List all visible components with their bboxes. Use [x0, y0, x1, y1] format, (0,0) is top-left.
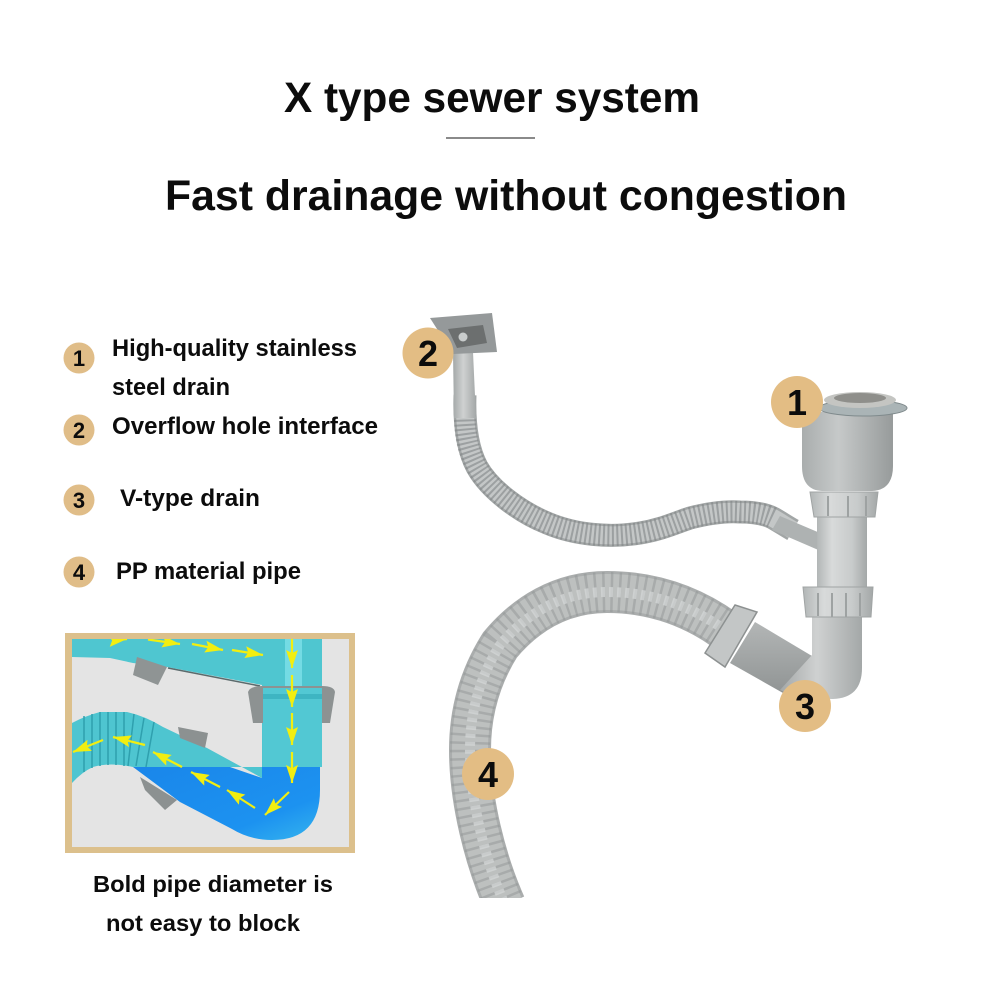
overflow plate: [430, 313, 497, 354]
v-type elbow: [780, 615, 862, 699]
vertical pipe collar: [248, 686, 335, 723]
upper pipe nut: [133, 657, 167, 685]
flow arrows: [73, 639, 292, 815]
pp material hose: [470, 592, 725, 905]
inset caption: Bold pipe diameter is: [93, 871, 333, 897]
legend item 3: 3: [73, 488, 85, 513]
legend item 4: [64, 556, 301, 588]
angled drain pipe: [730, 622, 835, 698]
inset: water flow diagram: [65, 633, 355, 853]
lower corrugated hose: [72, 712, 262, 783]
callout badge 1: 1: [787, 382, 807, 423]
legend item 2: Overflow hole interface: [112, 413, 378, 440]
legend item 3: V-type drain: [120, 485, 260, 512]
strainer cup: [802, 412, 893, 491]
callout badge 4: 4: [478, 754, 498, 795]
legend item 4: 4: [73, 560, 86, 585]
main tube: [817, 515, 867, 587]
legend item 2: 2: [73, 418, 85, 443]
strainer rim: [819, 400, 907, 416]
callout badge 1: [771, 376, 823, 428]
legend item 4: PP material pipe: [116, 558, 301, 585]
legend item 3: [64, 484, 260, 516]
lower nut: [803, 587, 873, 617]
title: X type sewer system: [284, 74, 700, 122]
legend item 1: 1: [73, 346, 85, 371]
callout badge 4: [462, 748, 514, 800]
inset caption: not easy to block: [106, 910, 300, 936]
overflow neck: [453, 352, 476, 418]
upper pipe: [72, 639, 322, 767]
subtitle: Fast drainage without congestion: [165, 172, 847, 220]
legend item 1: High-quality stainless: [112, 335, 357, 362]
water: [133, 767, 320, 840]
lower pipe nuts: [178, 727, 208, 748]
legend item 1: steel drain: [112, 374, 230, 401]
legend item 1: [64, 335, 357, 401]
callout badge 2: 2: [418, 333, 438, 374]
callout badge 3: [779, 680, 831, 732]
product: sewer assembly: [430, 313, 907, 905]
hose nut: [705, 605, 757, 667]
upper nut: [810, 492, 878, 517]
overflow stub: [772, 516, 823, 552]
callout badge 2: [402, 328, 454, 378]
callout badge 3: 3: [795, 686, 815, 727]
overflow hose: [465, 395, 793, 535]
inset caption: [93, 871, 333, 936]
legend list: [64, 335, 378, 588]
